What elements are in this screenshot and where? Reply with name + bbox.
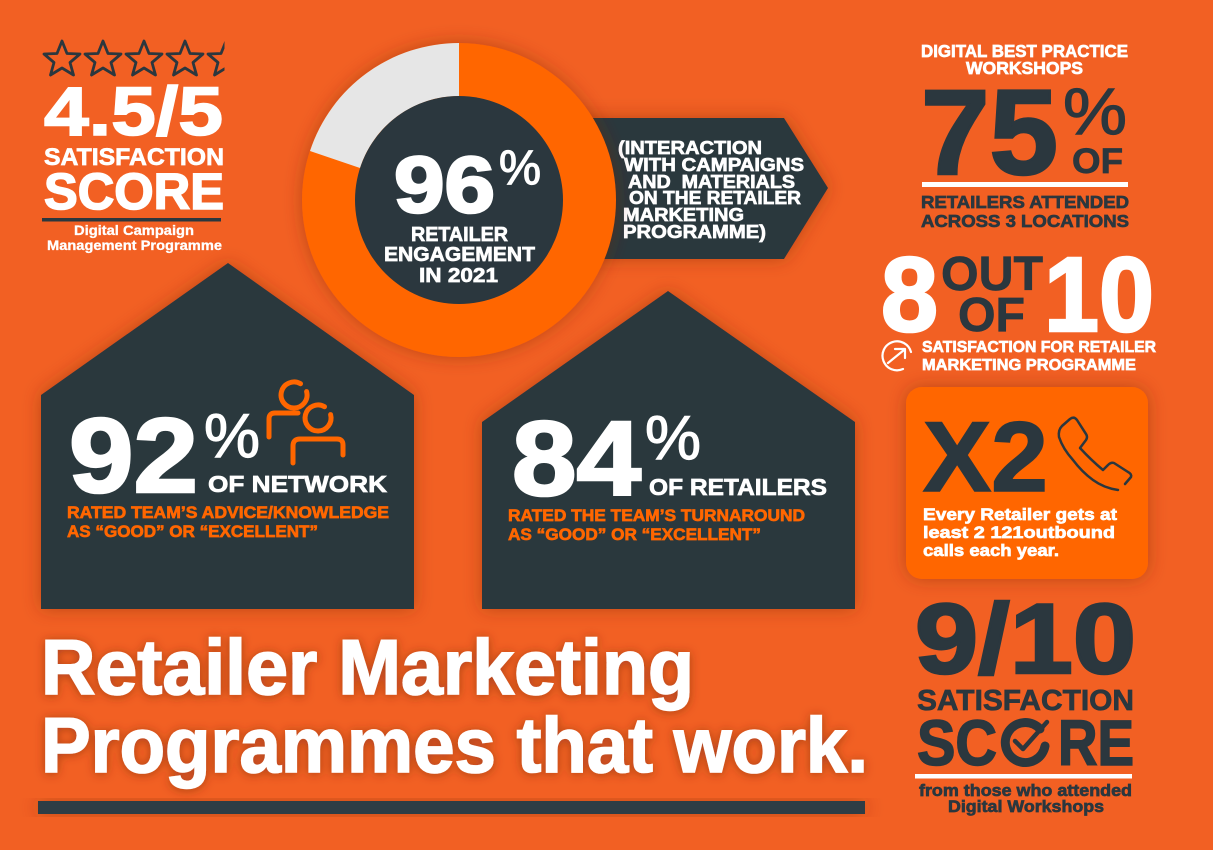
stat 92: 92 xyxy=(69,397,198,515)
label: out of: OUT xyxy=(941,248,1043,301)
heading: WORKSHOPS xyxy=(966,58,1083,78)
centre label xyxy=(384,223,535,287)
rule xyxy=(915,774,1132,778)
description: AS “GOOD” OR “EXCELLENT” xyxy=(67,522,318,541)
description: RATED TEAM’S ADVICE/KNOWLEDGE xyxy=(67,503,389,522)
label: of retailers: OF RETAILERS xyxy=(649,474,827,500)
icon: check in circle xyxy=(1005,722,1047,763)
remaining segment xyxy=(310,43,459,168)
donut centre xyxy=(355,96,563,304)
panel: 9/10 satisfaction score xyxy=(915,583,1136,816)
panel: workshops 75% xyxy=(921,41,1129,231)
description xyxy=(508,506,805,544)
panel: house 84% of retailers xyxy=(482,291,855,609)
label: out of: OF xyxy=(958,289,1025,342)
label: score with check icon xyxy=(917,707,1134,779)
panel: satisfaction score 4.5/5 xyxy=(42,41,244,253)
panel: house 92% of network xyxy=(41,263,414,609)
stat 75: 75 xyxy=(921,64,1058,200)
title: Programmes that work. xyxy=(41,701,868,789)
arrow: interaction explanation xyxy=(560,118,828,259)
label: satisfaction: SATISFACTION xyxy=(917,685,1134,717)
stat 10: 10 xyxy=(1044,236,1154,354)
arrow text: AND MATERIALS xyxy=(628,171,795,192)
title underline bar xyxy=(38,801,865,814)
percent sign: % xyxy=(499,142,541,195)
caption: Management Programme xyxy=(47,238,223,253)
label: out of xyxy=(941,248,1043,342)
icon: people xyxy=(269,382,343,463)
description: AS “GOOD” OR “EXCELLENT” xyxy=(508,525,761,544)
description: SATISFACTION FOR RETAILER xyxy=(922,339,1156,356)
caption xyxy=(47,223,223,253)
stat 9/10: 9/10 xyxy=(915,583,1136,694)
description: ACROSS 3 LOCATIONS xyxy=(921,211,1129,231)
panel: 8 out of 10 xyxy=(881,236,1156,374)
percent sign: % xyxy=(204,402,260,471)
arrow text: ON THE RETAILER xyxy=(629,187,801,208)
description: calls each year. xyxy=(923,541,1059,560)
icon: star rating 4.5 of 5 xyxy=(44,41,244,75)
label: of: OF xyxy=(1072,142,1123,181)
stat 84: 84 xyxy=(512,400,641,518)
heading: DIGITAL BEST PRACTICE xyxy=(921,41,1128,61)
panel: x2 calls xyxy=(906,387,1148,579)
centre label: IN 2021 xyxy=(419,264,498,287)
description: MARKETING PROGRAMME xyxy=(922,357,1136,374)
label: score with check icon: SC xyxy=(917,707,997,779)
description xyxy=(922,339,1156,374)
icon: telephone xyxy=(1059,418,1131,490)
icon: upward arrow in circle xyxy=(883,341,911,370)
description xyxy=(67,503,389,541)
stat 8: 8 xyxy=(881,236,938,354)
caption: Digital Campaign xyxy=(74,223,194,238)
description: RETAILERS ATTENDED xyxy=(921,192,1129,212)
description xyxy=(923,505,1117,560)
score value: 4.5/5 xyxy=(44,73,223,150)
arrow text: WITH CAMPAIGNS xyxy=(624,154,804,175)
label: score with check icon: RE xyxy=(1058,707,1134,779)
chart: donut 96% retailer engagement xyxy=(302,43,616,357)
label: of network: OF NETWORK xyxy=(208,471,387,497)
description: RATED THE TEAM’S TURNAROUND xyxy=(508,506,805,525)
stat x2: X2 xyxy=(923,401,1048,512)
arrow text xyxy=(618,137,804,242)
description: Every Retailer gets at xyxy=(923,505,1117,524)
arrow text: (INTERACTION xyxy=(618,137,762,158)
title: Retailer Marketing xyxy=(41,623,694,711)
description xyxy=(921,192,1129,231)
label: satisfaction: SATISFACTION xyxy=(44,144,224,171)
rule xyxy=(42,218,221,222)
centre label: ENGAGEMENT xyxy=(384,243,535,266)
stat 96: 96 xyxy=(394,140,495,229)
heading xyxy=(921,41,1128,78)
percent sign: % xyxy=(645,404,701,473)
rule xyxy=(922,182,1128,187)
centre label: RETAILER xyxy=(411,223,508,246)
title xyxy=(41,623,868,789)
label: score: SCORE xyxy=(44,163,224,220)
arrow text: PROGRAMME) xyxy=(623,221,766,242)
caption: from those who attended xyxy=(919,781,1132,800)
percent sign: % xyxy=(1063,74,1127,148)
caption: Digital Workshops xyxy=(948,797,1104,816)
arrow text: MARKETING xyxy=(623,204,744,225)
description: least 2 121outbound xyxy=(923,523,1115,542)
caption xyxy=(919,781,1132,816)
